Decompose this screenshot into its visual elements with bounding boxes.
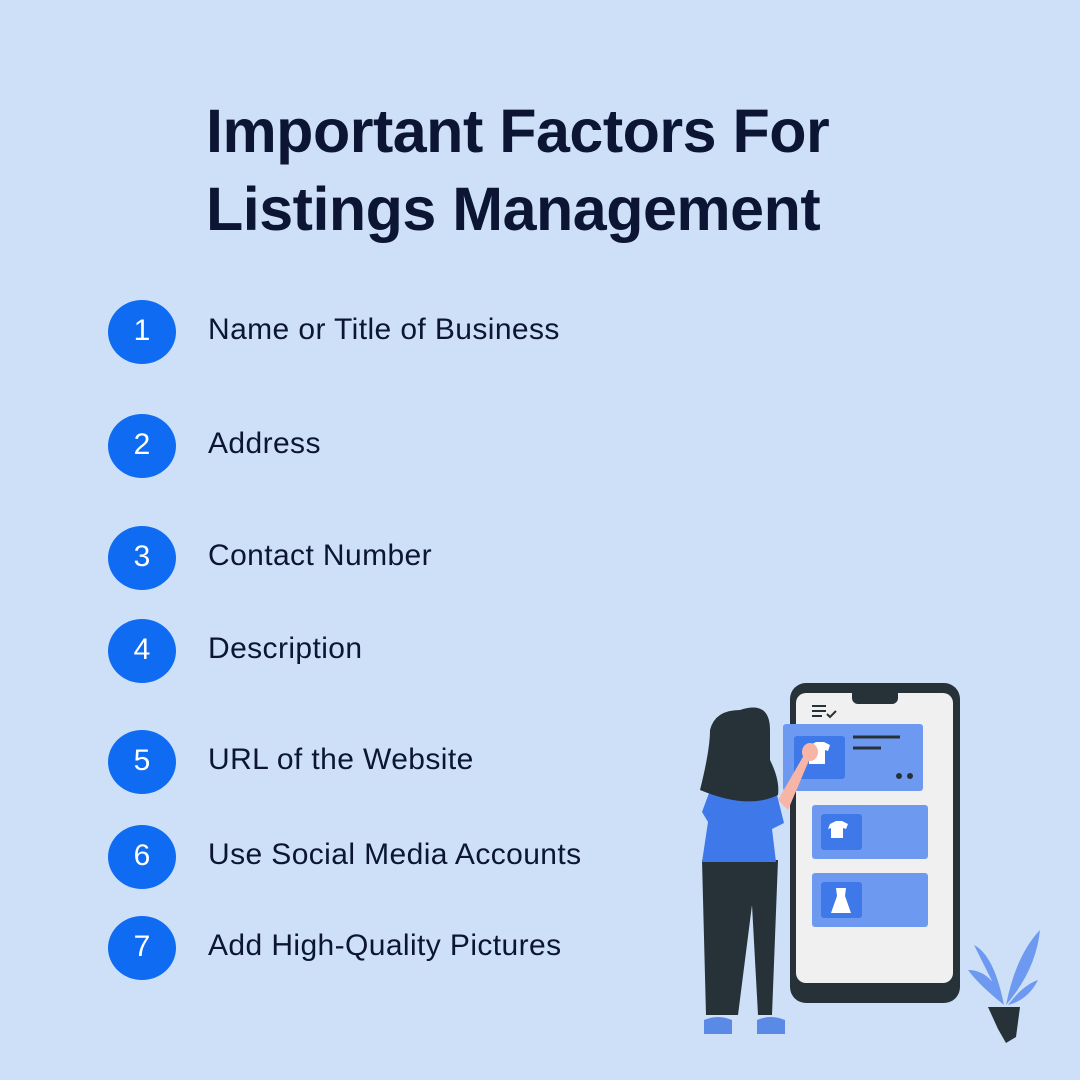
item 6: Use Social Media Accounts xyxy=(208,838,582,871)
item 4 xyxy=(108,619,362,683)
item 7: 7 xyxy=(134,930,150,963)
item 2: Address xyxy=(208,427,321,460)
phone xyxy=(790,683,960,1003)
card 3 xyxy=(812,873,928,927)
title: Listings Management xyxy=(206,175,820,243)
item 1 xyxy=(108,300,560,364)
item 2 xyxy=(108,414,321,478)
card 1 xyxy=(783,724,923,791)
item 3: 3 xyxy=(134,540,150,573)
plant xyxy=(968,930,1040,1043)
item 5 xyxy=(108,730,474,794)
title xyxy=(206,97,829,243)
item 2: 2 xyxy=(134,428,150,461)
item 3: Contact Number xyxy=(208,539,432,572)
item 7: Add High-Quality Pictures xyxy=(208,929,561,962)
item 4: Description xyxy=(208,632,362,665)
item 4: 4 xyxy=(134,633,150,666)
item 6: 6 xyxy=(134,839,150,872)
item 3 xyxy=(108,526,432,590)
item 6 xyxy=(108,825,582,889)
item 1: 1 xyxy=(134,314,150,347)
card 2 xyxy=(812,805,928,859)
item 5: 5 xyxy=(134,744,150,777)
item 1: Name or Title of Business xyxy=(208,313,560,346)
item 5: URL of the Website xyxy=(208,743,474,776)
woman xyxy=(700,708,818,1034)
item 7 xyxy=(108,916,561,980)
title: Important Factors For xyxy=(206,97,829,165)
